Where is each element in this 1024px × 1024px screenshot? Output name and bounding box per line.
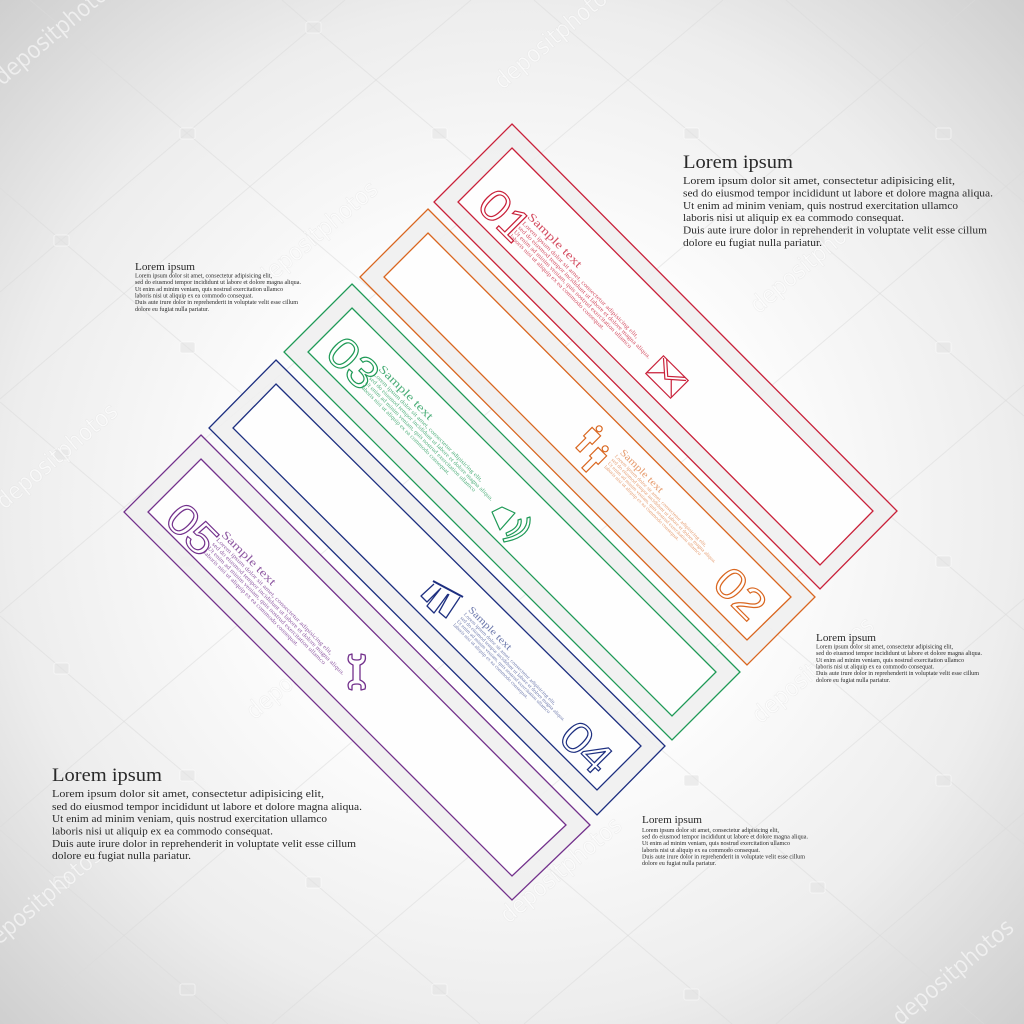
icon: envelope	[646, 356, 688, 398]
number 03: 03	[317, 327, 389, 399]
sample text 04: Lorem ipsum dolor sit amet, consectetur adipisicing elit,	[462, 613, 556, 707]
watermark text: depositphotos	[250, 175, 383, 293]
sample text 01	[507, 211, 665, 369]
sample text 05: sed do eiusmod tempor incididunt ut labore et dolore magna aliqua.	[210, 542, 346, 677]
text block: bottom left: Ut enim ad minim veniam, quis nostrud exercitation ullamco	[52, 813, 328, 825]
text block: top right: laboris nisi ut aliquip ex ea commodo consequat.	[683, 212, 904, 224]
icon: bar chart	[421, 581, 463, 618]
sample text 03: Sample text	[376, 363, 436, 423]
sample text 05: Sample text	[219, 529, 279, 589]
text block: bottom small: Duis aute irure dolor in reprehenderit in voluptate velit esse cillum	[642, 854, 805, 860]
text block: bottom left: laboris nisi ut aliquip ex ea commodo consequat.	[52, 826, 273, 838]
text block: top right: Lorem ipsum	[683, 153, 794, 173]
text block: right small: Ut enim ad minim veniam, quis nostrud exercitation ullamco	[816, 658, 964, 664]
sample text 04: laboris nisi ut aliquip ex ea commodo consequat.	[451, 623, 529, 700]
sample text 04	[451, 605, 577, 730]
text block: upper left small: Lorem ipsum	[135, 262, 195, 273]
sample text 05	[202, 529, 358, 686]
sample text 03: laboris nisi ut aliquip ex ea commodo consequat.	[359, 385, 451, 477]
panel 03: green band	[284, 284, 740, 740]
sample text 02	[602, 447, 728, 572]
panel 01: red band	[434, 124, 897, 589]
number 05: 05	[156, 493, 228, 565]
text block: upper left small: dolore eu fugiat nulla pariatur.	[135, 306, 210, 313]
text block: bottom left	[52, 766, 362, 862]
sample text 03: Lorem ipsum dolor sit amet, consectetur adipisicing elit,	[372, 372, 484, 484]
text block: upper left small: sed do eiusmod tempor incididunt ut labore et dolore magna aliqua.	[135, 280, 301, 286]
icon: speaker	[492, 507, 530, 542]
text block: bottom left: Lorem ipsum dolor sit amet, consectetur adipisicing elit,	[52, 788, 324, 800]
text block: right small: Lorem ipsum	[816, 633, 876, 644]
sample text 04: Ut enim ad minim veniam, quis nostrud exercitation ullamco	[455, 620, 551, 715]
text block: right small: laboris nisi ut aliquip ex ea commodo consequat.	[816, 664, 934, 670]
panel 05: purple band	[124, 435, 590, 900]
sample text 04: Sample text	[466, 605, 514, 653]
sample text 05: Lorem ipsum dolor sit amet, consectetur adipisicing elit,	[214, 537, 334, 657]
text block: top right: Ut enim ad minim veniam, quis nostrud exercitation ullamco	[683, 200, 959, 212]
text block: top right: dolore eu fugiat nulla pariatur.	[683, 237, 822, 249]
text block: bottom left: Duis aute irure dolor in reprehenderit in voluptate velit esse cillum	[52, 838, 356, 850]
sample text 02: Sample text	[617, 447, 666, 496]
text block: right small: Duis aute irure dolor in reprehenderit in voluptate velit esse cillum	[816, 671, 979, 677]
sample text 02: Lorem ipsum dolor sit amet, consectetur adipisicing elit,	[613, 454, 707, 549]
text block: upper left small: Ut enim ad minim veniam, quis nostrud exercitation ullamco	[135, 287, 283, 293]
green frame	[284, 284, 740, 740]
sample text 01: Lorem ipsum dolor sit amet, consectetur adipisicing elit,	[521, 221, 640, 340]
sample text 05: laboris nisi ut aliquip ex ea commodo consequat.	[202, 550, 300, 648]
text block: top right: sed do eiusmod tempor incididunt ut labore et dolore magna aliqua.	[683, 188, 993, 200]
text block: right small: dolore eu fugiat nulla pariatur.	[816, 677, 891, 684]
sample text 02: laboris nisi ut aliquip ex ea commodo consequat.	[602, 465, 680, 542]
icon: wrench	[348, 654, 365, 690]
number 01: 01	[469, 179, 541, 251]
text block: bottom left: Lorem ipsum	[52, 766, 163, 786]
sample text 03	[359, 363, 507, 512]
watermark text: depositphotos	[494, 811, 627, 929]
text block: bottom left: sed do eiusmod tempor incididunt ut labore et dolore magna aliqua.	[52, 801, 362, 813]
watermark text: depositphotos	[240, 607, 373, 725]
orange frame	[360, 209, 815, 665]
sample text 03: Ut enim ad minim veniam, quis nostrud exercitation ullamco	[363, 380, 476, 493]
text block: right small: Lorem ipsum dolor sit amet, consectetur adipisicing elit,	[816, 644, 954, 650]
watermark text: depositphotos	[744, 201, 877, 319]
text block: bottom small: Lorem ipsum dolor sit amet, consectetur adipisicing elit,	[642, 828, 780, 834]
purple frame	[124, 435, 590, 900]
sample text 05: Ut enim ad minim veniam, quis nostrud exercitation ullamco	[206, 546, 326, 666]
text block: right small	[816, 633, 982, 684]
icon: people	[574, 422, 612, 474]
text block: bottom left: dolore eu fugiat nulla pariatur.	[52, 850, 191, 862]
panel 04: navy band	[209, 360, 665, 815]
text block: upper left small: laboris nisi ut aliquip ex ea commodo consequat.	[135, 294, 253, 300]
sample text 02: Ut enim ad minim veniam, quis nostrud exercitation ullamco	[606, 462, 702, 557]
sample text 01: Ut enim ad minim veniam, quis nostrud exercitation ullamco	[512, 230, 632, 350]
text block: bottom small: laboris nisi ut aliquip ex ea commodo consequat.	[642, 848, 760, 854]
sample text 01: Sample text	[525, 211, 585, 271]
text block: bottom small: Ut enim ad minim veniam, quis nostrud exercitation ullamco	[642, 841, 790, 847]
sample text 01: sed do eiusmod tempor incididunt ut labore et dolore magna aliqua.	[516, 225, 652, 361]
sample text 03: sed do eiusmod tempor incididunt ut labore et dolore magna aliqua.	[367, 376, 494, 503]
text block: top right: Duis aute irure dolor in reprehenderit in voluptate velit esse cillum	[683, 224, 987, 236]
text block: upper left small: Lorem ipsum dolor sit amet, consectetur adipisicing elit,	[135, 274, 273, 280]
text block: bottom small: Lorem ipsum	[642, 815, 702, 826]
number 02: 02	[704, 557, 776, 629]
watermark text: depositphotos	[746, 611, 879, 729]
sample text 02: sed do eiusmod tempor incididunt ut labore et dolore magna aliqua.	[610, 458, 716, 565]
text block: upper left small: Duis aute irure dolor in reprehenderit in voluptate velit esse cillum	[135, 300, 298, 306]
text block: top right: Lorem ipsum dolor sit amet, consectetur adipisicing elit,	[683, 175, 955, 187]
sample text 04: sed do eiusmod tempor incididunt ut labore et dolore magna aliqua.	[459, 616, 565, 723]
text block: bottom small: sed do eiusmod tempor incididunt ut labore et dolore magna aliqua.	[642, 835, 808, 841]
number 04: 04	[550, 711, 622, 783]
text block: upper left small	[135, 262, 301, 313]
navy frame	[209, 360, 665, 815]
red frame	[434, 124, 897, 589]
text block: top right	[683, 153, 993, 249]
panel 02: orange band	[360, 209, 815, 665]
text block: right small: sed do eiusmod tempor incididunt ut labore et dolore magna aliqua.	[816, 651, 982, 657]
sample text 01: laboris nisi ut aliquip ex ea commodo consequat.	[508, 234, 606, 332]
text block: bottom small	[642, 815, 808, 867]
text block: bottom small: dolore eu fugiat nulla pariatur.	[642, 860, 717, 867]
